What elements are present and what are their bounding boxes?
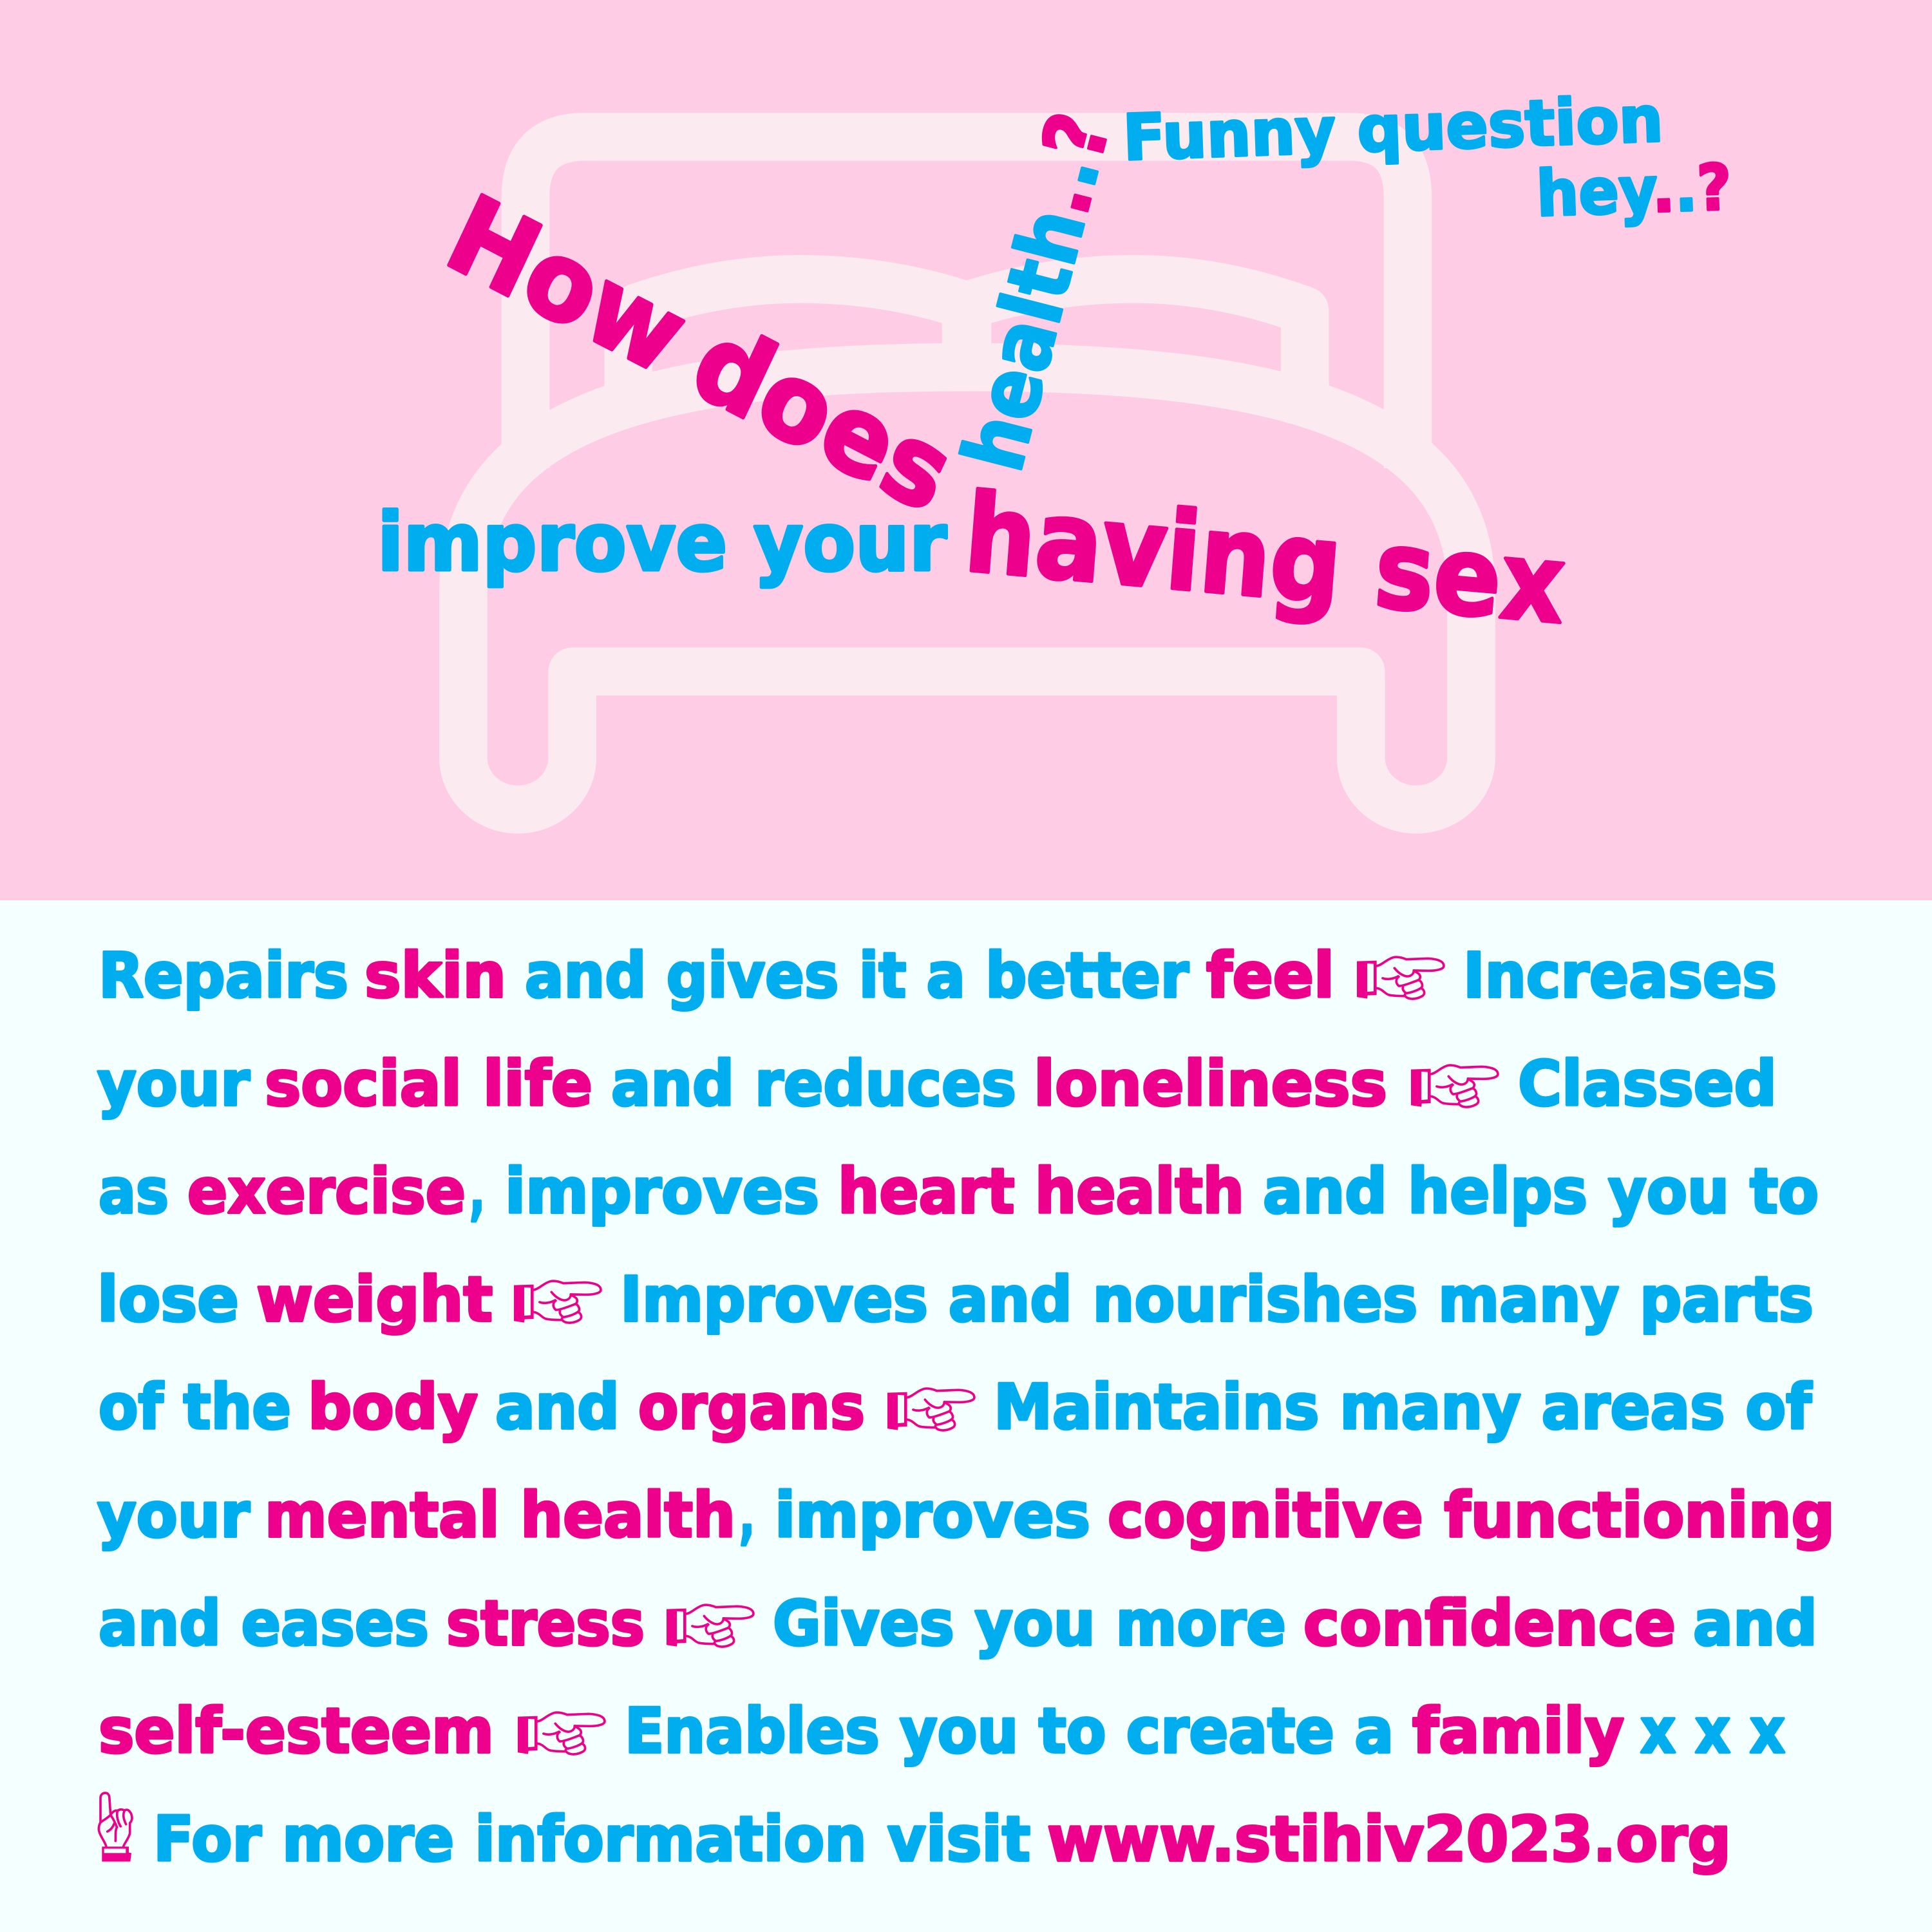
line 3: exercise [187, 1155, 466, 1227]
line 5: of the [99, 1371, 291, 1443]
title: health..?: health..? [944, 104, 1130, 480]
line 1: and gives it a better [525, 940, 1189, 1012]
line 6: mental health [265, 1479, 735, 1551]
title: how does: does [675, 299, 971, 536]
line 6: cognitive functioning [1108, 1479, 1835, 1551]
body text block [97, 940, 1835, 1875]
line 1: Increases [1463, 940, 1777, 1012]
line 4: Improves and nourishes many parts [620, 1264, 1814, 1336]
line 2 [97, 1048, 1777, 1120]
icon: pointing hand [1411, 1065, 1498, 1107]
line 5: organs [638, 1371, 865, 1443]
line 1 [99, 940, 1777, 1012]
line 8 [99, 1695, 1785, 1767]
icon: hand pointing up [99, 1793, 132, 1862]
line 7 [99, 1587, 1817, 1660]
line 9: www.stihiv2023.org [1047, 1803, 1731, 1875]
icon: pointing hand [514, 1281, 601, 1323]
line 2: your [97, 1048, 251, 1120]
icon: pointing hand [887, 1388, 974, 1430]
line 3 [99, 1155, 1819, 1227]
line 4: lose [97, 1264, 239, 1336]
line 3: , [469, 1155, 485, 1227]
line 6: your [97, 1479, 251, 1551]
line 8: Enables you to create a [625, 1695, 1394, 1767]
title: improve your: improve your [377, 497, 947, 589]
line 6 [97, 1479, 1835, 1551]
line 5: Maintains many areas of [994, 1371, 1812, 1443]
line 7: confidence [1303, 1587, 1676, 1660]
line 8: self-esteem [99, 1695, 494, 1767]
icon: pointing hand [518, 1712, 605, 1754]
line 3: and helps you to [1263, 1155, 1819, 1227]
line 8: x x x [1640, 1695, 1785, 1767]
title: how does: How [430, 172, 704, 399]
title: how does [430, 172, 971, 536]
line 5: body [308, 1371, 478, 1443]
line 4: weight [256, 1264, 493, 1336]
line 6: , [739, 1479, 755, 1551]
line 2: loneliness [1034, 1048, 1387, 1120]
line 1: skin [365, 940, 506, 1012]
line 6: improves [775, 1479, 1090, 1551]
line 5: and [495, 1371, 620, 1443]
panel: pink top background [0, 0, 1932, 900]
line 3: heart health [838, 1155, 1244, 1227]
icon: pointing hand [1357, 957, 1444, 999]
line 7: stress [446, 1587, 645, 1660]
subtitle: funny question: Funny question [1122, 83, 1664, 175]
panel: pale bottom background [0, 900, 1932, 1932]
line 9: For more information visit [153, 1803, 1030, 1875]
line 9 [99, 1793, 1731, 1875]
line 2: Classed [1518, 1048, 1777, 1120]
line 1: feel [1206, 940, 1334, 1012]
line 8: family [1412, 1695, 1624, 1767]
icon: bed outline [463, 137, 1471, 810]
line 1: Repairs [99, 940, 348, 1012]
line 2: and reduces [611, 1048, 1016, 1120]
line 5 [99, 1371, 1812, 1443]
icon: pointing hand [667, 1605, 753, 1647]
line 4 [97, 1264, 1814, 1336]
line 3: improves [505, 1155, 819, 1227]
line 7: and [1693, 1587, 1817, 1660]
subtitle: hey..?: hey..? [1535, 151, 1733, 231]
line 7: and eases [99, 1587, 429, 1660]
line 2: social life [265, 1048, 592, 1120]
line 7: Gives you more [773, 1587, 1286, 1660]
title: having sex: having sex [961, 470, 1569, 649]
line 3: as [99, 1155, 169, 1227]
